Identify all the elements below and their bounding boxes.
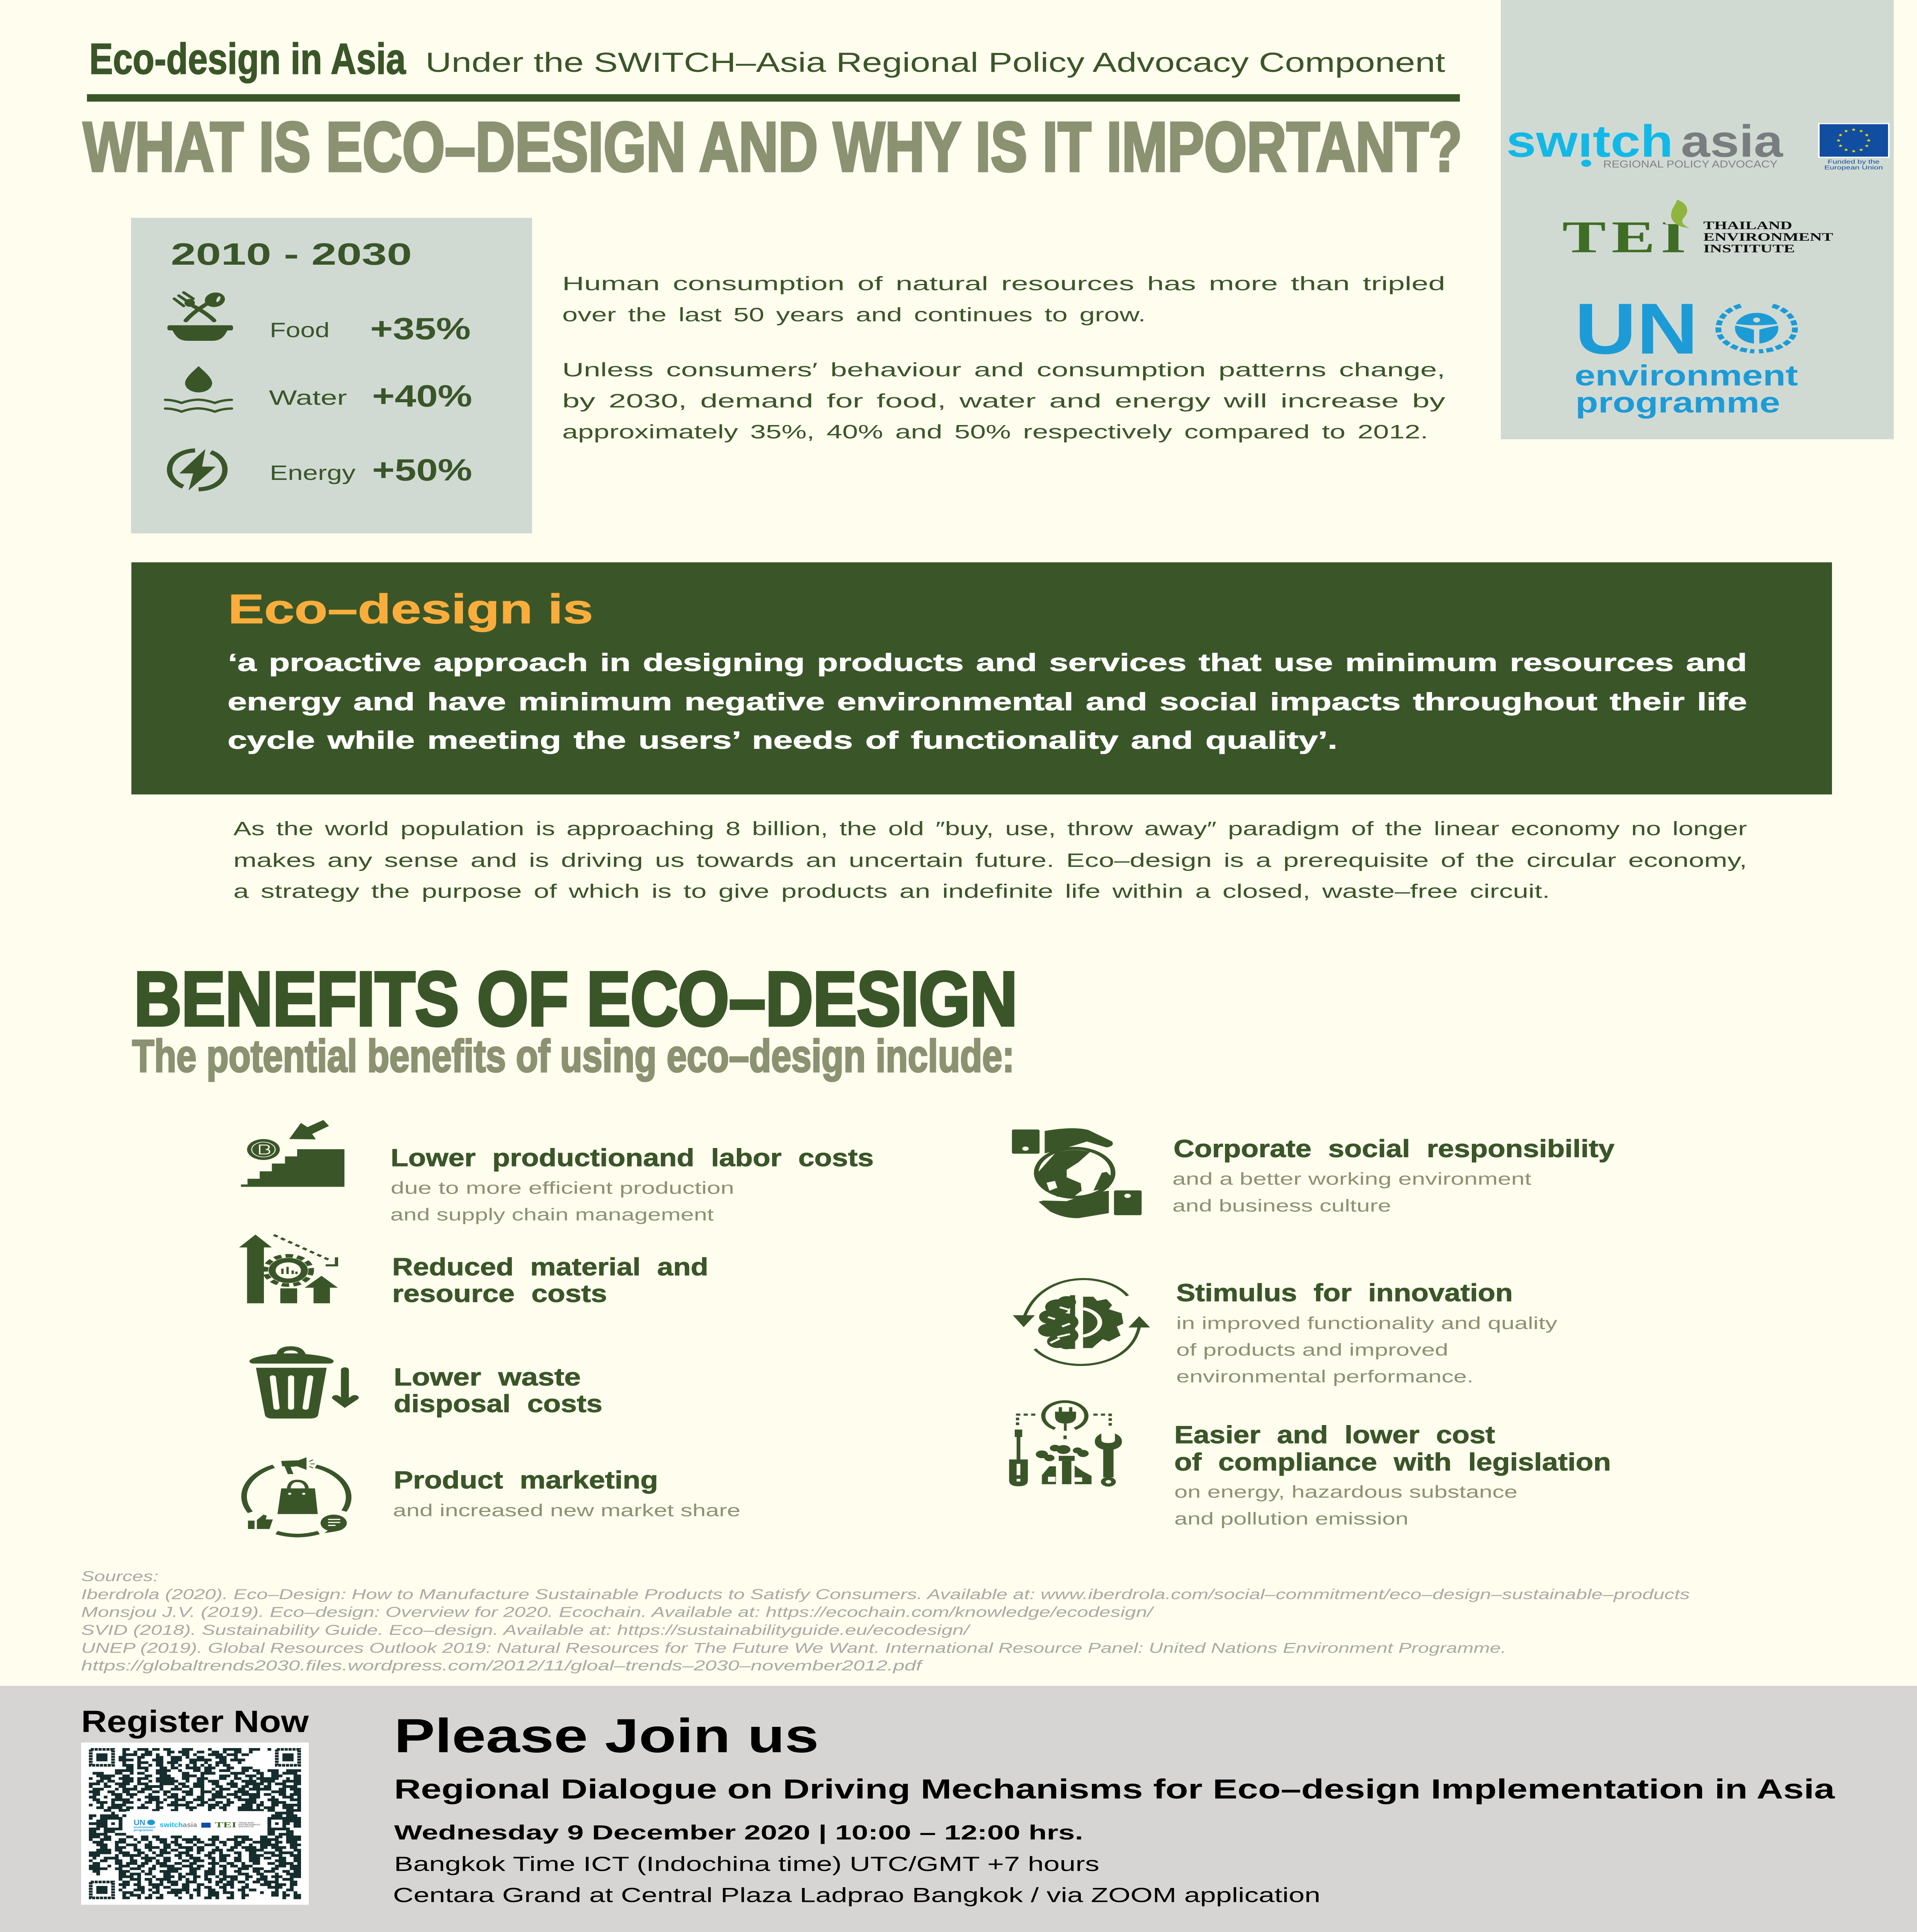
definition heading: Eco–design is — [228, 586, 593, 632]
text block: sources — [81, 1568, 1690, 1673]
text block: consumption intro: Unless consumers′ behaviour and consumption patterns change, — [562, 359, 1445, 381]
event title: Regional Dialogue on Driving Mechanisms for Eco–design Implementation in Asia — [394, 1774, 1835, 1804]
benefit: stimulus for innovation: in improved functionality and quality — [1176, 1314, 1557, 1333]
logo: switch asia: REGIONAL POLICY ADVOCACY — [1603, 158, 1778, 170]
heading: benefits of eco-design: BENEFITS OF ECO–DESIGN — [134, 956, 1017, 1042]
benefit: lower production and labor costs: due to more efficient production — [391, 1179, 734, 1197]
benefit: product marketing: Product marketing — [394, 1466, 658, 1494]
event venue: Centara Grand at Central Plaza Ladprao Bangkok / via ZOOM application — [393, 1884, 1320, 1906]
benefit: product marketing: and increased new market share — [393, 1501, 740, 1520]
header: series title: Under the SWITCH–Asia Regional Policy Advocacy Component — [425, 47, 1445, 78]
QR centre logos — [126, 1811, 264, 1835]
benefit: reduced material and resource costs: Reduced material and — [392, 1253, 708, 1281]
benefit: corporate social responsibility — [1012, 1128, 1615, 1218]
text block: consumption intro: by 2030, demand for food, water and energy will increase by — [562, 390, 1446, 412]
definition quote — [228, 648, 1747, 754]
icon: gear with rising arrows — [239, 1235, 338, 1303]
benefit: lower production and labor costs — [241, 1120, 874, 1224]
value: food: +35% — [370, 311, 471, 346]
benefit: product marketing — [244, 1458, 740, 1536]
text block: circular economy paragraph: As the world population is approaching 8 billion, the old ″buy, use, throw away″ paradigm of the linear economy no longer — [233, 818, 1747, 839]
icon: plug, tools and factory — [1009, 1401, 1122, 1486]
logo: switch asia: asia — [1681, 116, 1784, 167]
stats heading: 2010 - 2030 — [171, 237, 412, 271]
logo: UN environment programme: programme — [1575, 386, 1780, 419]
logo: EU flag: Funded by the — [1828, 158, 1880, 165]
icon: coin on falling stairs — [241, 1120, 344, 1187]
icon: hands holding globe — [1012, 1128, 1141, 1218]
icon: brain and gear cycle — [1013, 1279, 1150, 1365]
QR centre logos: INSTITUTE — [238, 1826, 254, 1828]
definition quote: energy and have minimum negative environmental and social impacts throughout their life — [228, 688, 1747, 716]
invitation heading: Please Join us — [394, 1709, 819, 1763]
logo: EU flag: European Union — [1824, 164, 1883, 171]
icon: energy bolt — [170, 449, 225, 490]
benefit: easier compliance with legislation: on energy, hazardous substance — [1174, 1483, 1517, 1502]
panel: partner logos — [1501, 0, 1894, 439]
text block: sources: SVID (2018). Sustainability Guide. Eco–design. Available at: https://sustainabilityguide.eu/ecodesign/ — [81, 1622, 971, 1638]
text block: circular economy paragraph — [233, 818, 1747, 902]
icon: marketing cycle with shopping bag — [244, 1458, 349, 1536]
benefit: corporate social responsibility: Corporate social responsibility — [1174, 1134, 1615, 1163]
panel: 2010-2030 demand stats — [131, 218, 532, 533]
QR centre logos: programme — [134, 1829, 153, 1832]
QR centre logos: TEI — [215, 1821, 236, 1829]
panel: event invitation footer — [0, 1686, 1917, 1932]
benefit: easier compliance with legislation: of compliance with legislation — [1174, 1448, 1611, 1476]
benefit: corporate social responsibility: and business culture — [1172, 1196, 1391, 1216]
benefit: stimulus for innovation: of products and improved — [1176, 1340, 1448, 1359]
benefit: stimulus for innovation — [1013, 1279, 1557, 1386]
text block: sources: Iberdrola (2020). Eco–Design: How to Manufacture Sustainable Products to Satisfy Consumers. Available at: www.iberdrola.com/social–commitment/eco–design–sustainable–products — [81, 1586, 1690, 1602]
header rule — [87, 94, 1460, 102]
benefit: stimulus for innovation: environmental performance. — [1176, 1367, 1473, 1386]
icon: trash can with down arrow — [249, 1346, 355, 1418]
text block: circular economy paragraph: a strategy the purpose of which is to give products an indefinite life within a closed, waste–free circuit. — [233, 880, 1550, 902]
value: water: +40% — [372, 379, 472, 413]
benefit: lower production and labor costs: and supply chain management — [390, 1205, 714, 1224]
logo: UN environment programme: UN — [1575, 289, 1698, 369]
text block: sources: UNEP (2019). Global Resources Outlook 2019: Natural Resources for The Future We Want. International Resource Panel: United Nations Environment Programme. — [81, 1640, 1506, 1656]
text block: consumption intro — [562, 273, 1446, 442]
text block: sources: Sources: — [81, 1568, 158, 1584]
logo: UN environment programme — [1575, 289, 1798, 419]
QR centre logos: switch — [160, 1821, 183, 1829]
benefit: corporate social responsibility: and a better working environment — [1172, 1169, 1531, 1189]
logo: TEI: THAILAND — [1703, 219, 1792, 231]
definition quote: cycle while meeting the users’ needs of functionality and quality’. — [228, 726, 1337, 754]
benefit: reduced material and resource costs: resource costs — [392, 1279, 607, 1307]
event time zone: Bangkok Time ICT (Indochina time) UTC/GMT +7 hours — [394, 1852, 1099, 1875]
text block: consumption intro: Human consumption of natural resources has more than tripled — [562, 273, 1445, 294]
text block: circular economy paragraph: makes any sense and is driving us towards an uncertain future. Eco–design is a prerequisite of the circular economy, — [233, 849, 1747, 871]
icon: food bowl with fork and spoon — [167, 290, 233, 341]
benefit: easier compliance with legislation: and pollution emission — [1174, 1509, 1408, 1528]
logo: EU flag — [1819, 124, 1889, 171]
definition quote: ‘a proactive approach in designing products and services that use minimum resources and — [228, 648, 1747, 677]
benefit: lower waste disposal costs — [249, 1346, 602, 1418]
QR centre logos: environment — [134, 1826, 155, 1829]
benefit: lower production and labor costs: Lower productionand labor costs — [391, 1144, 874, 1172]
benefit: stimulus for innovation: Stimulus for innovation — [1176, 1279, 1513, 1306]
QR centre logos: asia — [183, 1821, 197, 1829]
benefit: easier compliance with legislation — [1009, 1401, 1611, 1528]
benefit: lower waste disposal costs: Lower waste — [394, 1363, 581, 1391]
event date: Wednesday 9 December 2020 | 10:00 – 12:00 hrs. — [394, 1821, 1083, 1844]
label: energy: Energy — [270, 461, 356, 485]
logo: TEI: TEI — [1562, 212, 1692, 262]
logo: switch asia — [1506, 116, 1784, 170]
text block: consumption intro: approximately 35%, 40% and 50% respectively compared to 2012. — [562, 421, 1428, 442]
logo: TEI — [1562, 200, 1833, 262]
logo: UN environment programme: environment — [1575, 359, 1798, 392]
text block: consumption intro: over the last 50 years and continues to grow. — [562, 304, 1146, 325]
header: series title: Eco-design in Asia — [89, 35, 406, 83]
benefit: lower waste disposal costs: disposal costs — [394, 1389, 602, 1417]
logo: TEI: ENVIRONMENT — [1703, 231, 1833, 243]
label: water: Water — [269, 386, 347, 409]
QR centre logos: UN — [134, 1818, 145, 1827]
QR code — [81, 1743, 309, 1905]
header: series title — [89, 35, 1445, 83]
subheading: potential benefits: The potential benefits of using eco–design include: — [132, 1031, 1014, 1082]
logo: switch asia: switch — [1506, 116, 1673, 167]
text block: sources: Monsjou J.V. (2019). Eco–design: Overview for 2020. Ecochain. Available at: https://ecochain.com/knowledge/ecodesign/ — [81, 1604, 1155, 1620]
logo: TEI: INSTITUTE — [1703, 242, 1795, 255]
value: energy: +50% — [372, 452, 472, 487]
QR centre logos: ENVIRONMENT — [238, 1824, 260, 1826]
benefit: reduced material and resource costs — [239, 1235, 708, 1307]
text block: sources: https://globaltrends2030.files.wordpress.com/2012/11/gloal–trends–2030–november2012.pdf — [81, 1657, 924, 1673]
register heading: Register Now — [81, 1704, 309, 1739]
panel: eco-design definition — [131, 562, 1832, 794]
icon: water drop — [165, 366, 232, 412]
QR centre logos: THAILAND — [238, 1822, 254, 1824]
benefit: easier compliance with legislation: Easier and lower cost — [1174, 1421, 1495, 1449]
label: food: Food — [270, 318, 330, 342]
